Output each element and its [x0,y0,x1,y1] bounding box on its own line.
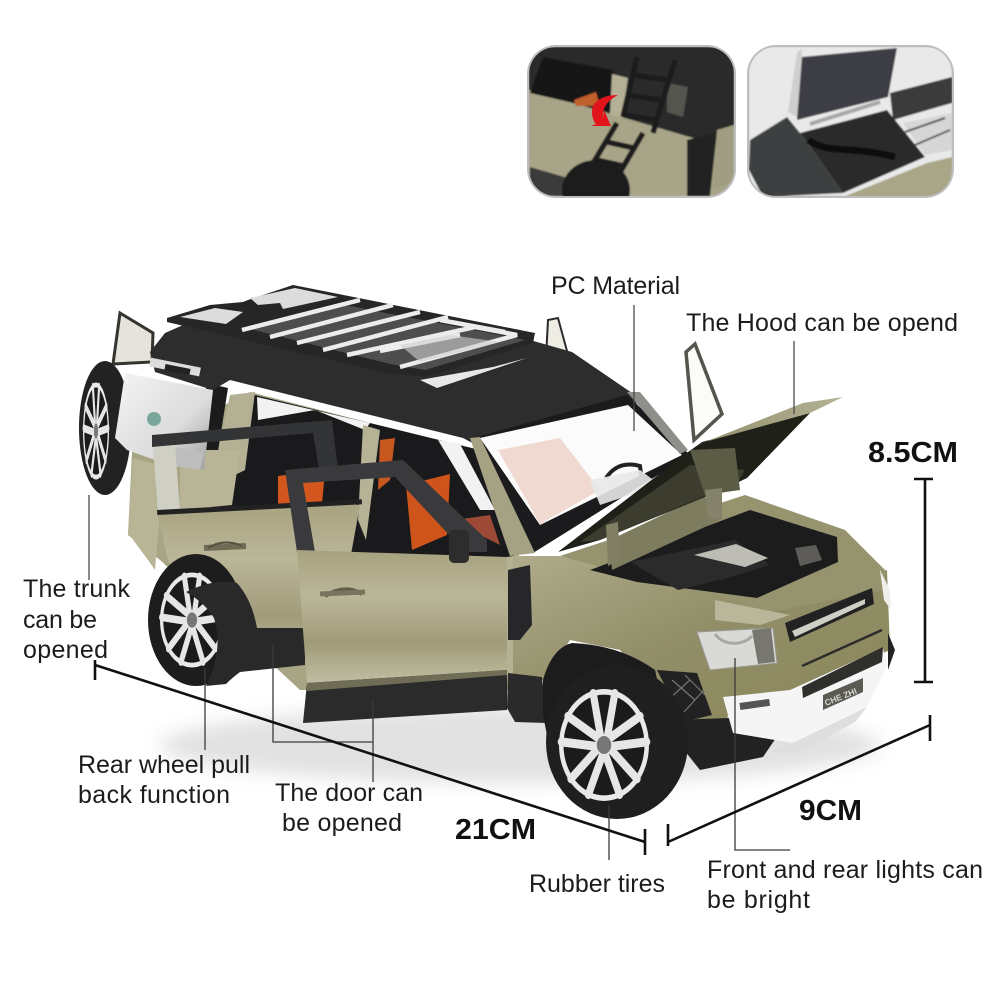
label: trunk: can be [23,606,97,634]
inset photo: roof storage box [747,45,954,198]
label: doors: be opened [282,809,402,837]
label: rear wheel: Rear wheel pull [78,751,250,779]
front wheel arch [543,643,675,790]
orange seats [278,470,325,505]
front wheel [546,665,688,819]
label: lights: Front and rear lights can [707,856,983,884]
fender and front body [507,495,890,735]
label: 21CM: 21CM [455,814,536,846]
leader line: hood [793,341,795,414]
label: rear wheel [78,751,250,809]
label: lights [707,856,983,914]
car photo: die-cast off-road SUV [79,285,895,819]
rear lower body panel [128,458,160,570]
open hood [558,397,843,566]
label: rear wheel: back function [78,781,230,809]
silver storage box [115,362,213,470]
floor shadow [160,707,880,783]
roof [150,322,640,447]
label: doors [275,779,423,837]
engine bay [590,495,838,598]
license plate [823,678,863,710]
rear body [128,392,520,690]
roof rack [167,285,535,377]
opened rear door [152,420,362,665]
arch mesh panel [657,670,712,722]
label: trunk [23,575,130,664]
label: 8.5CM: 8.5CM [868,437,958,469]
label: rubber tires: Rubber tires [529,870,665,898]
dimension line: length [95,660,645,855]
leader line: doors [273,645,373,782]
label: lights: be bright [707,886,810,914]
label: doors: The door can [275,779,423,807]
headlight [697,628,777,670]
windshield and pillars [470,392,690,556]
lower front bumper trim [670,718,780,770]
dimension line: width [668,715,930,846]
opened front door [285,460,507,723]
label: trunk: The trunk [23,575,130,603]
dimension line: height [914,479,933,682]
front bumper [723,647,887,752]
inset photo: fold-down ladder [527,45,736,198]
spare wheel [79,361,131,495]
leader line: PC material [633,305,635,431]
leader line: trunk [88,495,90,580]
cabin interior and window openings [180,383,515,560]
wing mirror [449,530,469,563]
rear wheel [148,554,244,686]
rear wheel arch and sill [186,582,305,686]
leader line: tires [608,805,610,860]
label: trunk: opened [23,636,108,664]
opened tailgate [113,313,153,364]
leader line: rear wheel [204,668,206,750]
label: hood: The Hood can be opend [686,309,958,337]
label: 9CM: 9CM [799,795,862,827]
label: PC Material: PC Material [551,272,680,300]
icon: red curved arrow [591,95,618,126]
leader line: lights [735,658,790,850]
license plate: CHE ZHI [823,686,858,708]
far open doors [546,318,722,440]
front grille [785,570,895,670]
